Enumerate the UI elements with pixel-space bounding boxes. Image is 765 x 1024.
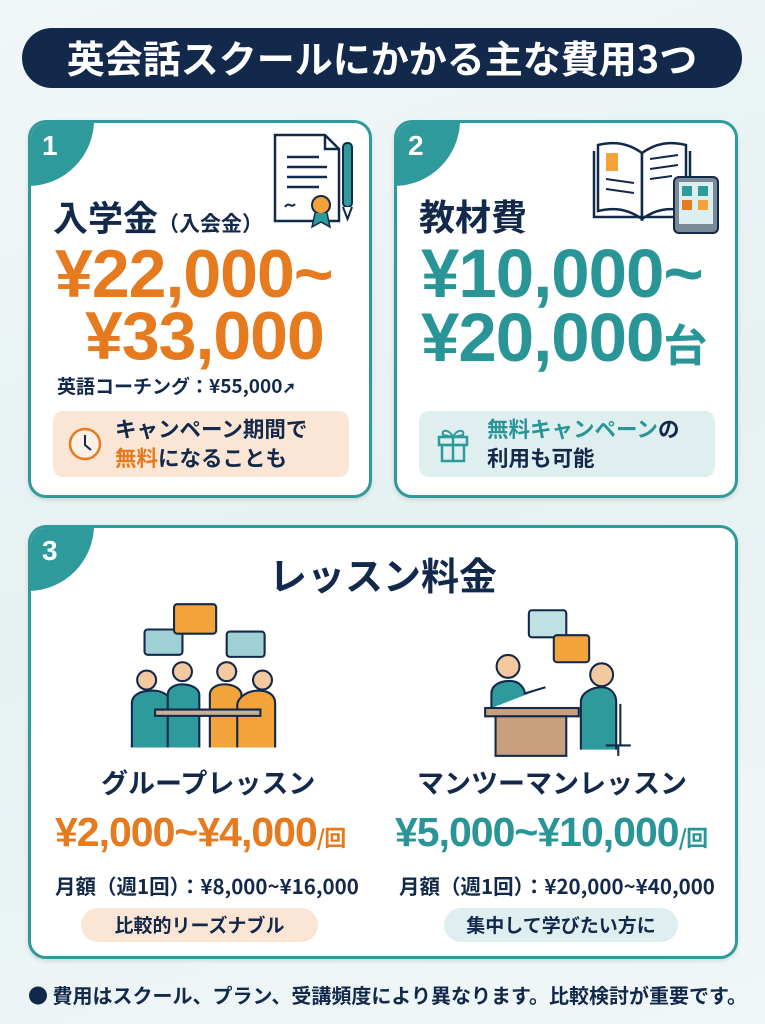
- icon: certificate: [274, 134, 353, 228]
- icon: group lesson: [130, 603, 276, 748]
- panel: entrance fee: [28, 120, 372, 498]
- one-on-one monthly: 月額（週1回）：¥20,000~¥40,000: [399, 870, 715, 900]
- callout: free campaign: 利用も可能: [487, 442, 595, 473]
- tag: reasonable: 比較的リーズナブル: [114, 911, 285, 938]
- callout: free campaign: [419, 411, 715, 477]
- heading: 教材費: [419, 189, 527, 241]
- panel: lesson fees: [28, 525, 738, 959]
- panel: materials: ¥20,000台: [421, 299, 706, 376]
- tag: intensive: 集中して学びたい方に: [466, 911, 656, 938]
- group lesson price: ¥2,000~¥4,000/回: [55, 809, 345, 855]
- icon: book and tablet: [592, 142, 719, 234]
- note: coaching: 英語コーチング：¥55,000➚: [57, 372, 296, 399]
- callout: campaign: 無料になることも: [115, 442, 287, 473]
- callout: free campaign: 無料キャンペーンの: [487, 413, 679, 444]
- icon: one-on-one lesson: [484, 609, 631, 757]
- callout: campaign: キャンペーン期間で: [115, 413, 307, 444]
- one-on-one price: ¥5,000~¥10,000/回: [395, 809, 707, 855]
- price: ¥22,000~: [55, 236, 333, 312]
- panel: entrance fee: ¥33,000: [85, 298, 324, 374]
- tag: intensive: [444, 908, 678, 942]
- tag: reasonable: [81, 908, 318, 942]
- badge 3: 3: [42, 535, 58, 566]
- title: 英会話スクールにかかる主な費用3つ: [67, 29, 697, 84]
- callout: campaign: [53, 411, 349, 477]
- price: ¥10,000~: [421, 235, 703, 312]
- badge 3: [28, 525, 94, 591]
- panel: materials: [394, 120, 738, 498]
- one-on-one label: マンツーマンレッスン: [417, 762, 687, 801]
- icon: clock: [68, 428, 102, 460]
- heading: レッスン料金: [269, 546, 497, 601]
- badge 2: 2: [408, 130, 424, 161]
- group lesson label: グループレッスン: [101, 762, 315, 801]
- heading: 入学金（入会金）: [53, 191, 263, 242]
- group monthly: 月額（週1回）：¥8,000~¥16,000: [55, 870, 359, 900]
- badge 1: 1: [42, 130, 58, 161]
- badge 1: [28, 120, 94, 186]
- badge 2: [394, 120, 460, 186]
- icon: gift: [438, 430, 468, 462]
- footer note: ● 費用はスクール、プラン、受講頻度により異なります。比較検討が重要です。: [28, 980, 747, 1009]
